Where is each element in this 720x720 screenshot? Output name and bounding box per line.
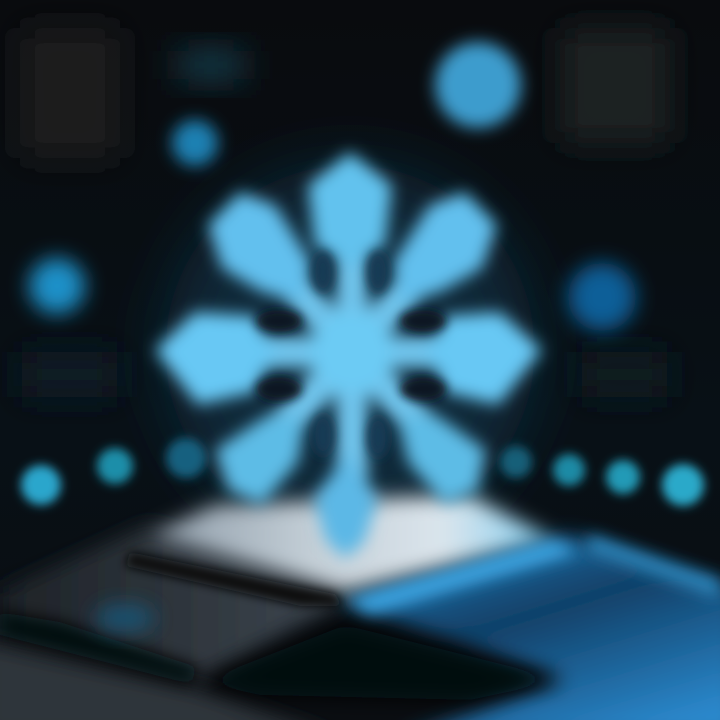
laptop screen plate — [150, 495, 555, 592]
petal: top — [308, 152, 392, 268]
petal: left — [155, 312, 275, 405]
spokes — [240, 240, 470, 480]
laptop blue reflection — [95, 604, 155, 632]
glow behind flower — [165, 165, 535, 535]
icon: circle left — [29, 258, 85, 314]
icon: circle right — [568, 263, 636, 331]
panel: dark card top left — [20, 28, 120, 158]
laptop dark hinge — [125, 552, 345, 606]
icon: large circle top right — [435, 42, 521, 128]
row of small circles right — [500, 446, 704, 506]
laptop bright edge — [345, 540, 580, 614]
flower graphic — [155, 152, 542, 558]
petal: upper left — [208, 192, 312, 302]
laptop right deck — [340, 535, 720, 720]
petal: lower left — [215, 415, 305, 505]
panel: faint card left — [22, 352, 117, 397]
petal: bottom — [314, 455, 378, 558]
dark gaps between petals — [256, 251, 446, 458]
centre hub — [312, 312, 392, 392]
laptop base — [0, 495, 720, 720]
row of small circles left — [21, 438, 206, 505]
laptop left shadow — [0, 612, 200, 684]
laptop dark wedge — [200, 625, 565, 700]
panel: faint card right — [582, 352, 667, 397]
laptop lower left — [0, 640, 340, 720]
panel: teal label top centre — [178, 50, 244, 80]
icon: circle top left — [172, 120, 218, 166]
laptop left deck — [0, 525, 345, 680]
laptop right highlight — [585, 535, 720, 598]
petal: right — [428, 312, 542, 405]
panel: dark card top right — [560, 28, 670, 143]
petal: upper right — [392, 192, 497, 302]
petal: lower right — [398, 415, 486, 505]
